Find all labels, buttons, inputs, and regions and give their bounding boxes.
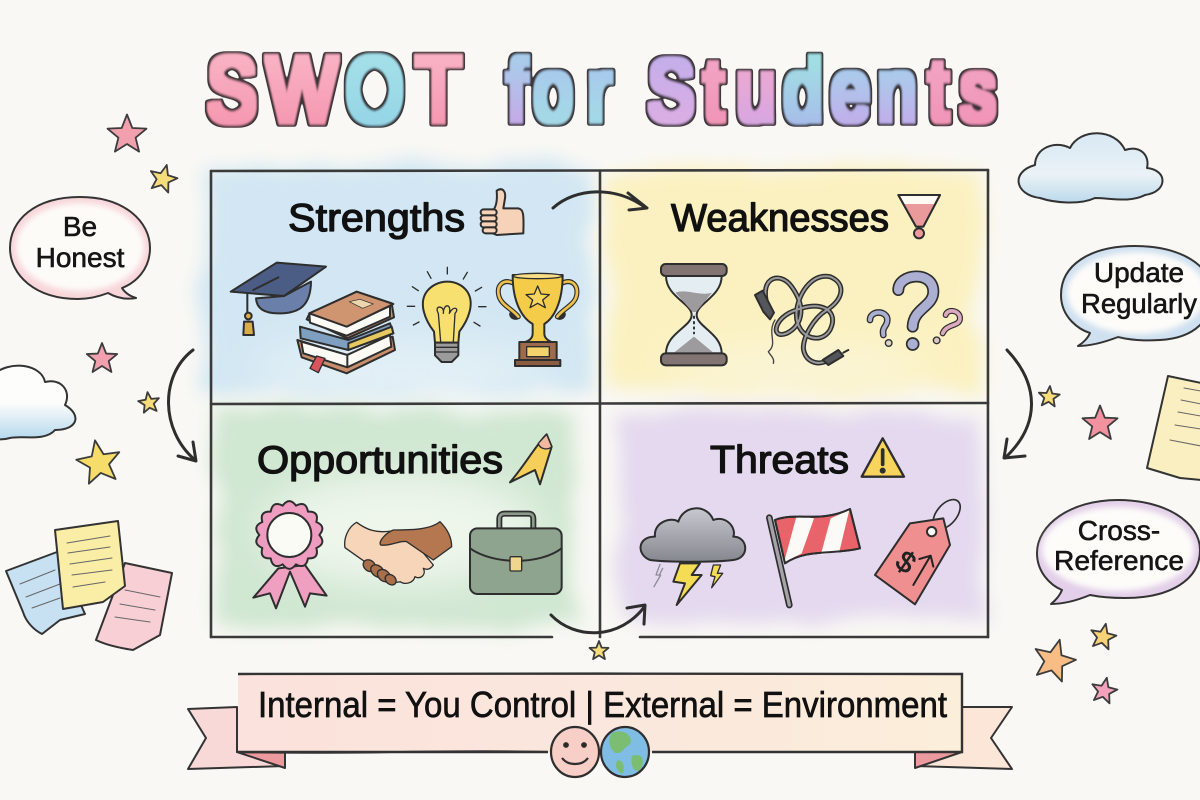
icon: rosette ribbon — [253, 501, 327, 608]
icon: thumbs up — [481, 189, 524, 235]
icon: stack of books — [297, 292, 395, 373]
title: d — [784, 43, 822, 139]
title: t — [929, 43, 948, 139]
ribbon tail: left — [188, 707, 285, 769]
bubble: cross-reference: Reference — [1054, 545, 1184, 576]
arrow: strengths to weaknesses — [553, 192, 647, 210]
weaknesses wash — [606, 170, 978, 390]
note: pink — [96, 563, 172, 650]
cloud: left — [0, 366, 75, 439]
heading: threats: Threats — [710, 439, 849, 482]
bubble: be honest: Be — [63, 211, 97, 242]
ribbon tail: right — [915, 707, 1012, 769]
panel: strengths — [204, 166, 592, 400]
title: O — [346, 38, 403, 141]
icon: tangled cable — [765, 276, 841, 363]
banner body — [238, 674, 962, 752]
icon: funnel — [898, 195, 940, 238]
heading: opportunities: Opportunities — [257, 439, 503, 482]
icon: smiley — [551, 727, 599, 777]
icon: light bulb — [407, 267, 486, 362]
bubble: update regularly: Regularly — [1081, 288, 1197, 319]
icon: cable plugs — [755, 291, 848, 365]
icon: hourglass — [661, 264, 727, 365]
arrow: strengths to opportunities — [168, 350, 196, 461]
banner — [188, 673, 1012, 777]
title: r — [588, 43, 611, 139]
bubble: be honest — [10, 197, 150, 299]
icon: arrow flag — [510, 434, 552, 484]
title: W — [267, 38, 337, 141]
title: e — [831, 43, 869, 139]
title: S — [207, 38, 256, 141]
bubble: cross-reference — [1037, 500, 1200, 604]
threats wash — [618, 412, 980, 624]
strengths icons — [231, 189, 577, 373]
title: u — [737, 43, 775, 139]
panel: weaknesses — [606, 170, 978, 395]
strengths wash — [204, 166, 592, 392]
ribbon folds — [237, 752, 962, 768]
icon: question marks — [870, 276, 960, 350]
heading: strengths: Strengths — [288, 197, 465, 240]
icon: red striped flag — [769, 509, 860, 605]
arrow: opportunities to threats — [551, 605, 645, 633]
opportunities icons — [253, 434, 562, 608]
matrix frame — [211, 170, 988, 637]
threats icons — [641, 438, 965, 605]
icon: trophy — [498, 273, 577, 366]
icon: handshake — [345, 522, 452, 587]
icon: globe — [601, 727, 649, 777]
icon: dollar sign: $ — [890, 544, 922, 581]
title: S — [648, 43, 694, 139]
title: s — [961, 43, 995, 139]
icon: price tag — [875, 495, 965, 604]
weaknesses icons — [661, 195, 960, 365]
banner text: Internal = You Control | External = Environment — [258, 684, 947, 725]
bubble: update regularly: Update — [1094, 257, 1184, 288]
decorative stars — [73, 114, 1119, 704]
title: t — [704, 43, 723, 139]
title: n — [878, 43, 916, 139]
title: T — [416, 38, 461, 141]
panel: threats — [618, 412, 980, 624]
opportunities wash — [212, 408, 578, 628]
bubble: be honest: Honest — [36, 242, 125, 273]
note: blue — [6, 552, 85, 634]
icon: warning triangle — [862, 438, 904, 477]
title — [207, 38, 995, 141]
heading: weaknesses: Weaknesses — [671, 197, 889, 240]
arrow: weaknesses to threats — [1004, 350, 1032, 458]
note: yellow — [55, 521, 125, 609]
cloud: right — [1019, 133, 1163, 203]
title: o — [534, 43, 572, 139]
bubble: update regularly — [1061, 246, 1200, 346]
icon: storm cloud — [641, 508, 745, 605]
icon: graduation cap — [231, 263, 326, 335]
icon: briefcase — [470, 514, 562, 594]
panel: opportunities — [212, 408, 578, 628]
title: f — [507, 43, 527, 139]
sticky note: right — [1147, 376, 1200, 480]
sticky notes: left pile — [6, 521, 172, 650]
bubble: cross-reference: Cross- — [1078, 515, 1160, 546]
banner outline — [238, 673, 962, 753]
